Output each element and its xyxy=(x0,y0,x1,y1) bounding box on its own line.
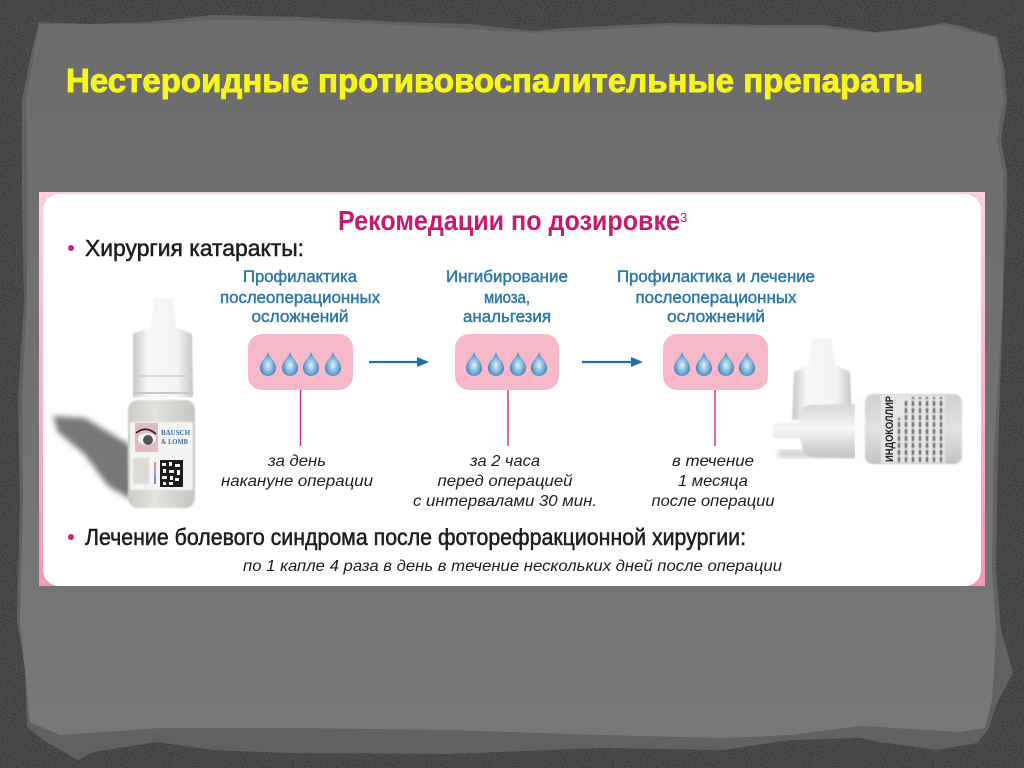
icon: lying bottle with cap: ИНДОКОЛЛИР xyxy=(884,396,896,462)
icon: upright bottle with shadow: BAUSCH xyxy=(161,428,190,437)
timing text 2: перед операцией xyxy=(438,473,573,490)
drops box 1 xyxy=(248,334,353,390)
timing text 1: за день xyxy=(267,453,326,470)
column 3 heading: осложнений xyxy=(667,307,765,326)
heading: Рекомедации по дозировке xyxy=(338,205,680,236)
column 1 heading xyxy=(220,267,380,326)
bullet: cataract surgery: Хирургия катаракты: xyxy=(85,235,304,261)
connector lines xyxy=(300,390,715,446)
arrow 2 xyxy=(582,357,643,367)
timing text 1 xyxy=(221,453,373,490)
column 1 heading: осложнений xyxy=(252,307,348,326)
icon: lying bottle with cap xyxy=(772,338,962,464)
column 3 heading xyxy=(617,267,815,326)
timing text 3 xyxy=(652,453,775,510)
column 1 heading: Профилактика xyxy=(243,267,358,286)
drops box 2 xyxy=(455,334,559,390)
column 2 heading: Ингибирование xyxy=(446,267,568,286)
icon: upright bottle with shadow: & LOMB xyxy=(161,437,188,446)
timing text 2: с интервалами 30 мин. xyxy=(413,493,597,510)
timing text 2 xyxy=(413,453,597,510)
column 2 heading: анальгезия xyxy=(463,307,551,326)
title: Нестероидные противовоспалительные препараты xyxy=(66,62,923,99)
column 2 heading xyxy=(446,267,568,326)
bottom dosing note: по 1 капле 4 раза в день в течение нескольких дней после операции xyxy=(243,558,782,575)
timing text 3: после операции xyxy=(652,493,775,510)
timing text 1: накануне операции xyxy=(221,473,373,490)
timing text 2: за 2 часа xyxy=(469,453,540,470)
arrow 1 xyxy=(369,357,429,367)
column 1 heading: послеоперационных xyxy=(220,288,380,307)
column 2 heading: миоза, xyxy=(484,288,530,307)
panel: dosing recommendations xyxy=(39,192,985,586)
bullet: pain after photorefractive surgery: Лечение болевого синдрома после фоторефракционной хирургии: xyxy=(85,524,746,550)
heading: 3 xyxy=(680,210,687,225)
column 3 heading: Профилактика и лечение xyxy=(617,267,815,286)
drops box 3 xyxy=(663,334,768,390)
timing text 3: в течение xyxy=(672,453,754,470)
timing text 3: 1 месяца xyxy=(678,473,748,490)
column 3 heading: послеоперационных xyxy=(636,288,797,307)
icon: upright bottle with shadow xyxy=(53,298,195,508)
